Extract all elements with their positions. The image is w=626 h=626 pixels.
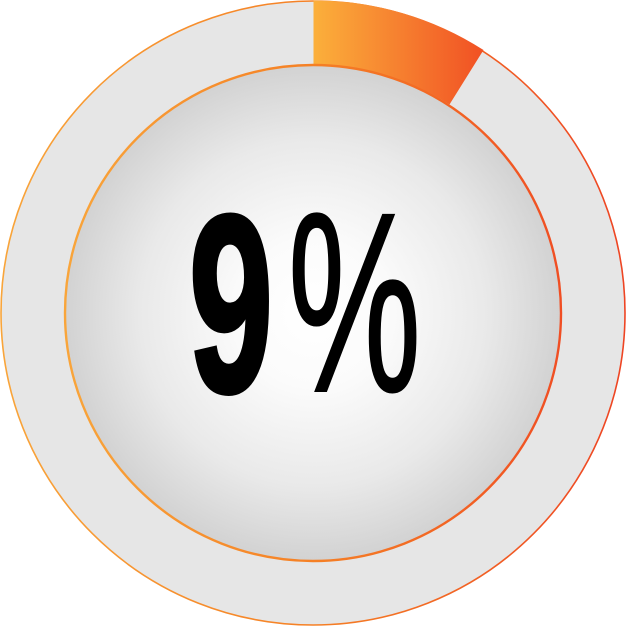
inner disc with radial shading — [65, 65, 561, 561]
progress segment: 9 percent — [314, 0, 484, 104]
percent sign: % — [288, 160, 421, 446]
percentage label — [189, 160, 421, 446]
digit 9: 9 — [189, 164, 273, 446]
